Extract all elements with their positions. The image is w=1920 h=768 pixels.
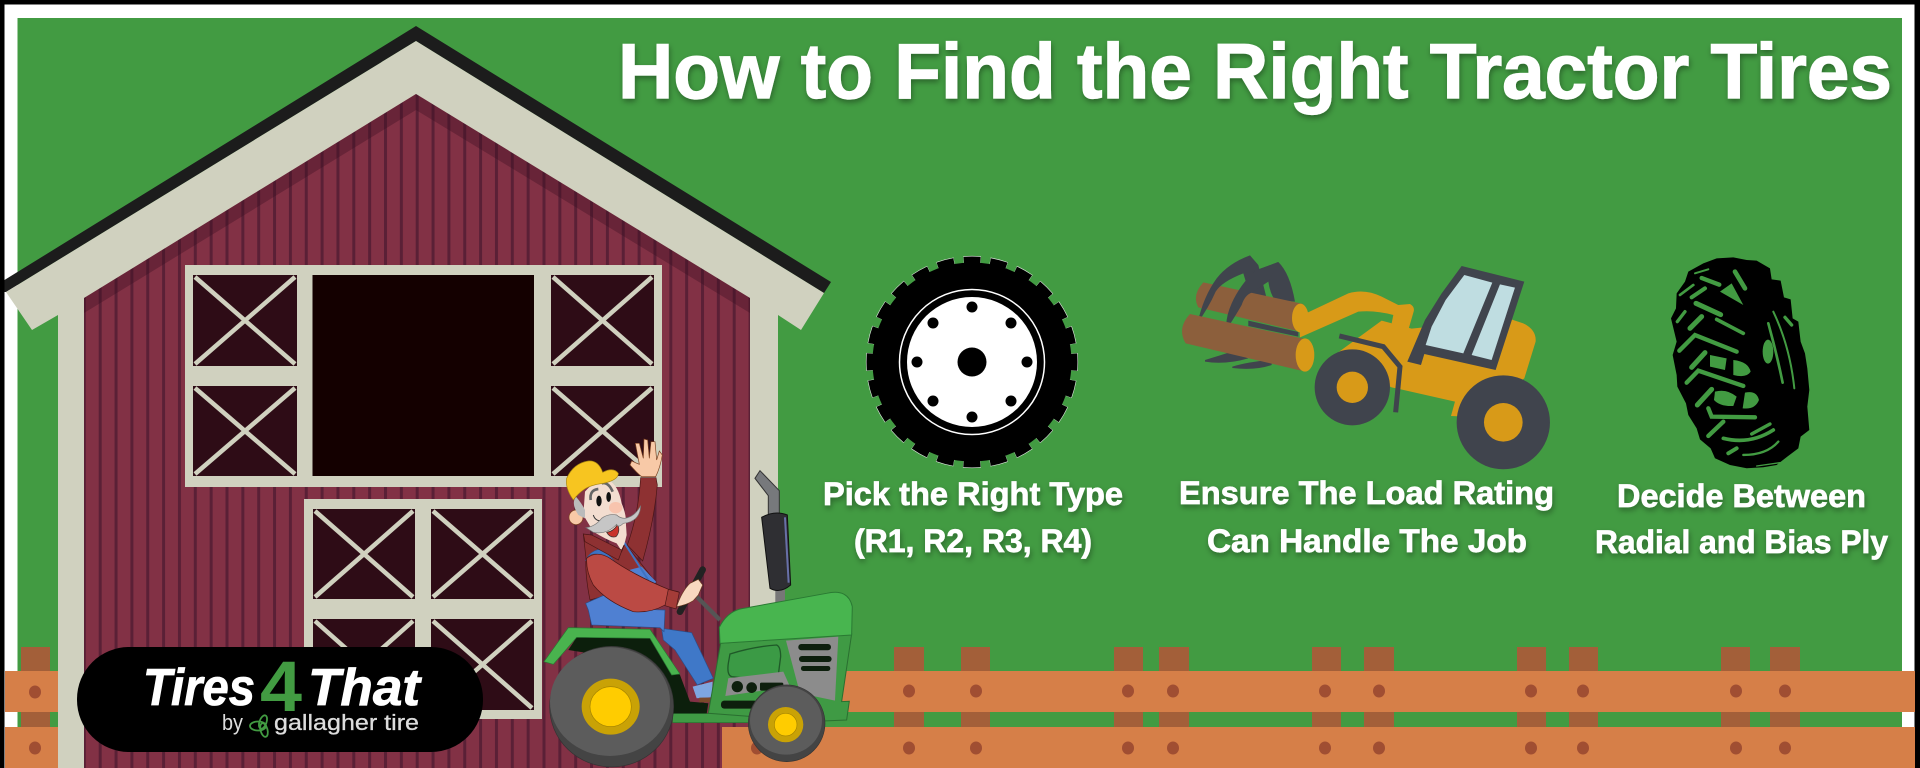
- waving hand: [630, 439, 662, 477]
- front wheel: [748, 685, 825, 762]
- label: pick the right type: (R1, R2, R3, R4): [854, 523, 1092, 559]
- nose: [609, 502, 622, 513]
- hand on wheel: [677, 579, 703, 607]
- loader front claws: [1198, 255, 1255, 323]
- cuff: [665, 589, 679, 609]
- raised arm: [627, 478, 657, 561]
- eyes: [596, 496, 602, 506]
- exhaust pipe: [755, 471, 791, 602]
- logo: Tires4That by gallagher tire: That: [308, 659, 423, 717]
- fence bolts: [29, 684, 1791, 754]
- label: pick the right type: Pick the Right Type: [823, 476, 1123, 512]
- logo: Tires4That by gallagher tire: by: [222, 710, 243, 735]
- logo: Tires4That by gallagher tire: 4: [260, 648, 303, 727]
- torso: [583, 534, 656, 600]
- steering column: [697, 597, 720, 620]
- tractor fender: [544, 628, 680, 675]
- loader body: [1330, 318, 1536, 417]
- rear wheel: [550, 646, 674, 767]
- upper log: [1196, 282, 1303, 332]
- tractor chassis dark underside: [568, 637, 708, 714]
- icon: tractor tire: [870, 260, 1074, 464]
- mustache: [586, 506, 641, 533]
- gauges panel: [725, 672, 790, 696]
- farmer legs: [662, 628, 713, 702]
- fence rails: [5, 671, 1915, 768]
- logo knot icon: [250, 714, 269, 738]
- label: load rating: Can Handle The Job: [1207, 523, 1527, 559]
- hood: [719, 592, 852, 643]
- overall bib: [629, 567, 656, 585]
- face: [583, 480, 627, 551]
- barn: [4, 26, 831, 768]
- dashboard oval: [728, 645, 781, 678]
- icon: loader carrying logs: [1182, 255, 1550, 469]
- tractor body behind farmer: [568, 471, 852, 723]
- logo: Tires4That by gallagher tire: [77, 647, 483, 752]
- overalls: [586, 593, 665, 632]
- mouth: [607, 524, 619, 537]
- grille: [786, 637, 838, 701]
- smile: [593, 515, 602, 521]
- label: load rating: Ensure The Load Rating: [1179, 475, 1554, 511]
- barn roof: black ridge: [4, 26, 831, 293]
- upper window frame: [185, 265, 662, 487]
- label: radial and bias ply: Decide Between: [1617, 478, 1866, 514]
- hat: [566, 461, 618, 500]
- fence posts: [21, 647, 1800, 727]
- tractor body: [708, 592, 852, 721]
- eyebrows: [590, 483, 613, 500]
- label: radial and bias ply: [1595, 478, 1888, 560]
- barn roof: cream trim and wall pillars: [6, 41, 824, 768]
- claw beam: [1248, 321, 1298, 337]
- title: How to Find the Right Tractor Tires: [618, 27, 1892, 115]
- tractor chassis rail: [673, 714, 754, 723]
- tractor fender and wheels: [544, 628, 825, 767]
- label: pick the right type: [823, 476, 1123, 559]
- loader rear wheel: [1457, 375, 1550, 469]
- lower log: [1182, 314, 1307, 371]
- icon: bias ply tire silhouette: [1671, 257, 1809, 468]
- loader front wheel: [1315, 349, 1390, 425]
- steering wheel: [680, 570, 703, 612]
- loader cab: [1407, 266, 1524, 370]
- barn wall: red siding: [84, 94, 750, 768]
- sleeve: [587, 554, 678, 612]
- farmer: [566, 439, 720, 632]
- ear: [569, 510, 583, 525]
- loader back claw prongs: [1255, 262, 1295, 302]
- logo: Tires4That by gallagher tire: gallagher tire: [274, 710, 419, 735]
- label: radial and bias ply: Radial and Bias Ply: [1595, 524, 1888, 560]
- overall straps: [586, 549, 616, 562]
- loader arm: [1299, 291, 1414, 337]
- label: load rating: [1179, 475, 1554, 559]
- loader fender: [1339, 336, 1400, 412]
- collar: [583, 534, 624, 560]
- hair: [574, 497, 585, 518]
- claw tips under logs: [1205, 352, 1248, 363]
- lower barn door: [304, 499, 542, 719]
- logo: Tires4That by gallagher tire: Tires: [143, 659, 255, 717]
